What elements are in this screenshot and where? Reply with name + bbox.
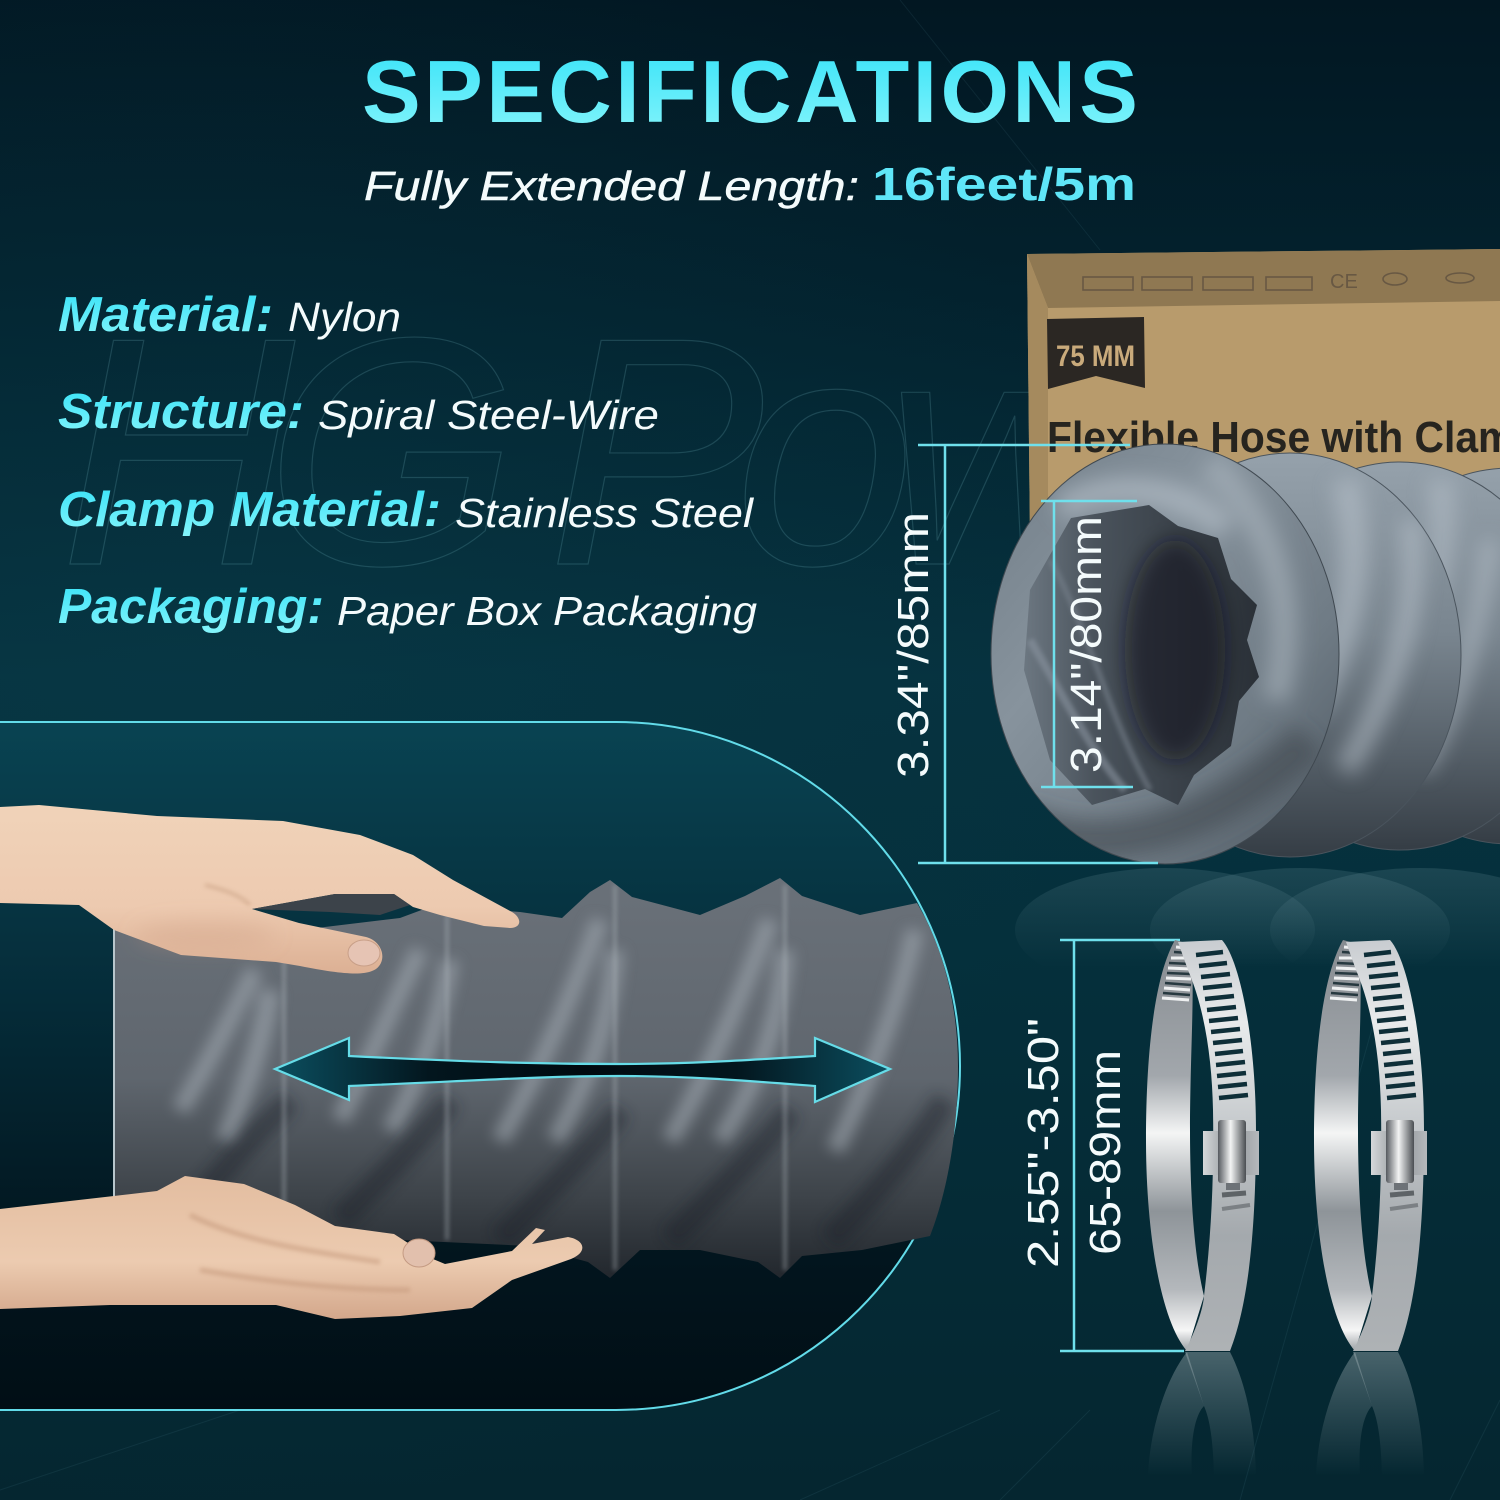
spec: structure: Structure: [58, 385, 304, 439]
spec: packaging: Paper Box Packaging [337, 588, 757, 634]
thumb nail top [348, 940, 380, 966]
clamp dimension: 65-89mm [1081, 1050, 1130, 1255]
spec: material: Material: [58, 288, 273, 342]
thumb nail bottom [403, 1239, 435, 1267]
spec: structure [58, 385, 659, 439]
dimension: inner diameter: 3.14"/80mm [1062, 516, 1111, 773]
clamp right [1314, 940, 1427, 1351]
75 MM badge: 75 MM [1056, 340, 1135, 373]
title: SPECIFICATIONS [362, 42, 1138, 141]
box flap icons [1083, 271, 1474, 293]
spec: clamp material: Clamp Material: [58, 483, 441, 537]
top hand [0, 805, 519, 973]
dimension: inner diameter [1041, 501, 1137, 787]
spec: structure: Spiral Steel-Wire [318, 392, 659, 438]
spec: clamp material: Stainless Steel [455, 490, 755, 536]
spec: material: Nylon [288, 294, 401, 340]
box flap icons: CE [1330, 271, 1358, 293]
hose: compressed end view [991, 444, 1500, 864]
75 MM badge [1047, 317, 1145, 389]
spec: packaging: Packaging: [58, 580, 324, 634]
cardboard box [1027, 249, 1500, 540]
hose ring 2 [1235, 452, 1462, 858]
hose reflection [1015, 868, 1500, 992]
watermark outline: HG Pow [60, 270, 1139, 633]
dimension: outer diameter [889, 445, 1158, 863]
hose ring 4 [1340, 468, 1500, 844]
hose opening [1024, 505, 1259, 805]
spec: clamp material [58, 483, 755, 537]
subtitle: fully extended length [364, 158, 1136, 210]
bottom hand [0, 1176, 582, 1319]
clamp left [1146, 940, 1259, 1351]
hose ring 1 front [991, 444, 1339, 864]
spec: material [58, 288, 401, 342]
clamp dimension [1019, 940, 1184, 1351]
clamp reflections [1148, 1352, 1424, 1475]
spec: packaging [58, 580, 757, 634]
dimension: outer diameter: 3.34"/85mm [889, 512, 938, 778]
hose ring 3 [1354, 462, 1500, 850]
clamp dimension: 2.55"-3.50" [1019, 1018, 1068, 1268]
subtitle: fully extended length: Fully Extended Length: [364, 163, 859, 209]
spec list [58, 288, 757, 634]
stretched hose [113, 878, 958, 1278]
double-headed arrow [275, 1038, 890, 1102]
panel: stretch demo pill [0, 722, 960, 1410]
subtitle: fully extended length: 16feet/5m [872, 158, 1136, 210]
